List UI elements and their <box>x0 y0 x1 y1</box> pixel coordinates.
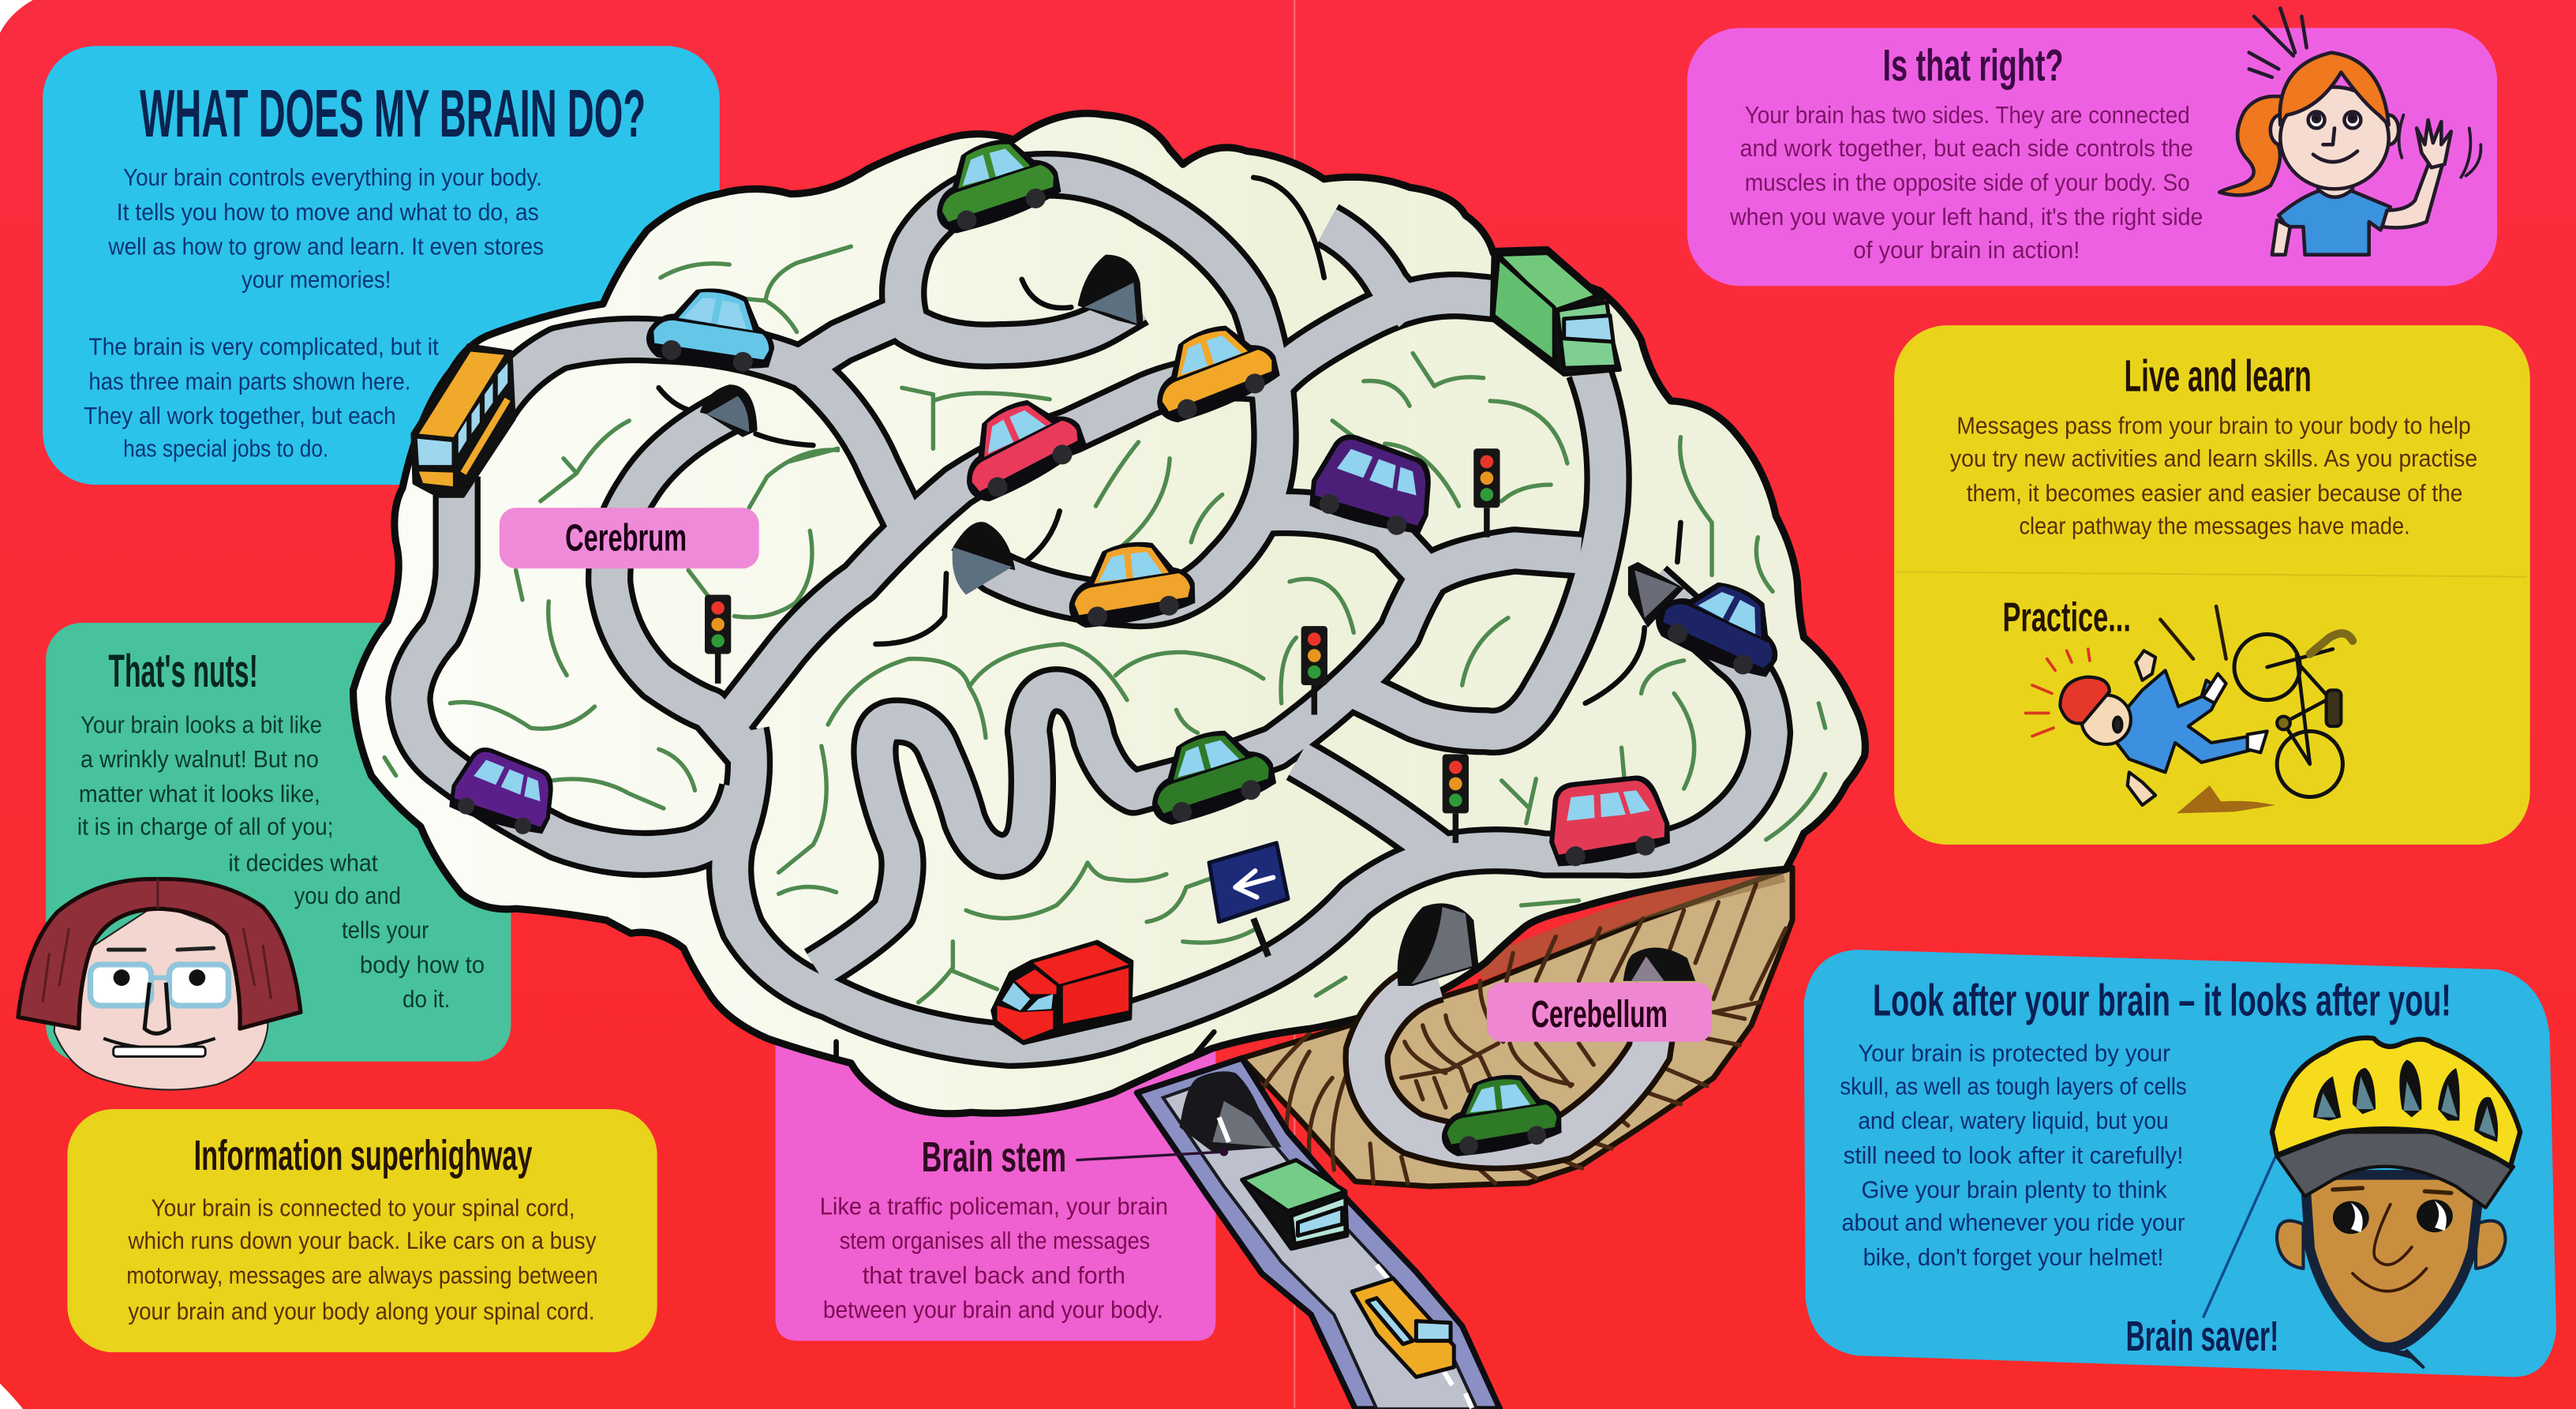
vehicle: navy car <box>1649 559 1799 689</box>
road sign <box>1209 843 1288 957</box>
panel: look after your brain <box>1804 950 2556 1377</box>
superhighway text: motorway, messages are always passing between <box>126 1262 598 1289</box>
vehicle: purple van <box>1303 426 1446 546</box>
vehicle: pink van <box>1543 773 1673 868</box>
messages text <box>1950 413 2477 540</box>
brain stem text: Like a traffic policeman, your brain <box>820 1193 1168 1220</box>
walnut text: matter what it looks like, <box>79 781 320 808</box>
messages text: them, it becomes easier and easier because of the <box>1967 480 2462 507</box>
heading: Live and learn <box>2125 350 2312 400</box>
panel: brain stem <box>776 1035 1215 1341</box>
messages text: Messages pass from your brain to your body to help <box>1956 413 2471 440</box>
icon: falling cyclist and bike <box>2026 606 2353 813</box>
vehicle: red truck <box>992 942 1132 1044</box>
two sides text: of your brain in action! <box>1853 237 2080 264</box>
brain <box>354 114 1865 1114</box>
superhighway text: your brain and your body along your spinal cord. <box>128 1298 595 1325</box>
brain stem spinal road <box>1136 1059 1500 1409</box>
tunnels in cerebrum <box>700 255 1684 628</box>
title: WHAT DOES MY BRAIN DO? <box>140 77 646 152</box>
road network surface <box>409 174 1769 1045</box>
two sides text: Your brain has two sides. They are connected <box>1745 102 2190 129</box>
vehicle: green car top <box>922 127 1066 237</box>
intro text: It tells you how to move and what to do, as <box>117 199 539 226</box>
walnut text <box>77 711 485 1013</box>
walnut text: it decides what <box>228 849 378 876</box>
vehicle: green mid car <box>1137 718 1281 829</box>
arrow: caption to helmet <box>2203 1156 2275 1317</box>
vehicle: yellow bus on brain stem <box>1352 1279 1454 1377</box>
heading: That's nuts! <box>108 646 258 697</box>
intro text: well as how to grow and learn. It even stores <box>107 234 544 260</box>
brain stem text: stem organises all the messages <box>840 1227 1150 1254</box>
intro text: They all work together, but each <box>84 403 396 429</box>
protection text: skull, as well as tough layers of cells <box>1840 1073 2187 1100</box>
intro text: Your brain controls everything in your body. <box>123 164 542 191</box>
walnut text: body how to <box>360 951 485 978</box>
panel: that's nuts <box>46 623 511 1062</box>
heading: Is that right? <box>1883 40 2064 90</box>
vehicle: yellow bus <box>412 345 515 497</box>
panel: is that right <box>1687 8 2497 286</box>
walnut text: you do and <box>294 882 401 909</box>
road network outlines <box>409 174 1769 1045</box>
walnut text: it is in charge of all of you; <box>77 813 334 840</box>
panel: what does my brain do <box>43 46 720 485</box>
heading: Information superhighway <box>194 1132 532 1179</box>
two sides text: muscles in the opposite side of your body. So <box>1745 169 2190 196</box>
brain saver caption: Brain saver! <box>2126 1313 2278 1360</box>
label: cerebellum <box>1487 983 1712 1042</box>
label: cerebellum: Cerebellum <box>1531 994 1668 1036</box>
cerebellum road and tunnels <box>1367 903 1695 1148</box>
walnut text: a wrinkly walnut! But no <box>80 746 319 773</box>
protection text: and clear, watery liquid, but you <box>1858 1107 2169 1134</box>
protection text <box>1840 1040 2187 1271</box>
two sides text: when you wave your left hand, it's the right side <box>1729 204 2203 230</box>
traffic light <box>1473 448 1500 538</box>
heading: Brain stem <box>922 1134 1066 1181</box>
superhighway text <box>126 1194 598 1325</box>
intro text: has special jobs to do. <box>123 436 328 463</box>
vehicle: purple van lower left <box>444 740 566 845</box>
brain stem text: between your brain and your body. <box>823 1296 1163 1323</box>
intro text: has three main parts shown here. <box>88 368 410 395</box>
arrow: brain stem pointer <box>1076 1148 1228 1160</box>
intro text: your memories! <box>242 266 391 293</box>
intro text: The brain is very complicated, but it <box>88 334 439 361</box>
panel: information superhighway <box>67 1109 657 1352</box>
vehicle: green car on cerebellum <box>1436 1070 1564 1158</box>
two sides text <box>1729 102 2203 264</box>
protection text: bike, don't forget your helmet! <box>1863 1244 2164 1271</box>
superhighway text: which runs down your back. Like cars on a busy <box>127 1227 597 1254</box>
vehicle: orange car <box>1140 312 1286 427</box>
icon: waving girl <box>2219 8 2481 255</box>
icon: boy with cycle helmet <box>2272 1038 2520 1367</box>
brain stem text: that travel back and forth <box>863 1262 1125 1289</box>
vehicle: green van on brain stem <box>1242 1160 1347 1249</box>
two sides text: and work together, but each side controls the <box>1739 135 2193 162</box>
traffic light <box>1443 754 1469 843</box>
vehicle: pink car <box>944 382 1093 508</box>
icon: face with glasses <box>18 879 301 1090</box>
protection text: still need to look after it carefully! <box>1844 1142 2183 1169</box>
vehicle: orange low car <box>1063 537 1198 629</box>
walnut text: do it. <box>402 986 450 1013</box>
protection text: about and whenever you ride your <box>1842 1209 2185 1236</box>
walnut text: Your brain looks a bit like <box>80 711 322 738</box>
brain stem text <box>820 1193 1168 1323</box>
label: cerebrum <box>500 508 759 568</box>
walnut text: tells your <box>342 917 429 944</box>
messages text: you try new activities and learn skills. As you practise <box>1950 445 2477 472</box>
label: cerebrum: Cerebrum <box>565 517 687 559</box>
protection text: Give your brain plenty to think <box>1861 1177 2167 1204</box>
cerebellum <box>1242 868 1792 1186</box>
traffic light <box>1301 626 1327 715</box>
panel: live and learn <box>1894 325 2530 845</box>
protection text: Your brain is protected by your <box>1858 1040 2170 1067</box>
practice caption: Practice... <box>2003 594 2131 640</box>
brain creases <box>659 178 1681 1056</box>
vehicle: green truck <box>1492 248 1619 375</box>
superhighway text: Your brain is connected to your spinal cord, <box>152 1194 575 1221</box>
vehicle: blue car <box>642 276 784 380</box>
brain wrinkles <box>384 246 1825 1002</box>
messages text: clear pathway the messages have made. <box>2019 513 2410 540</box>
intro text <box>84 164 544 463</box>
traffic light <box>705 595 731 684</box>
